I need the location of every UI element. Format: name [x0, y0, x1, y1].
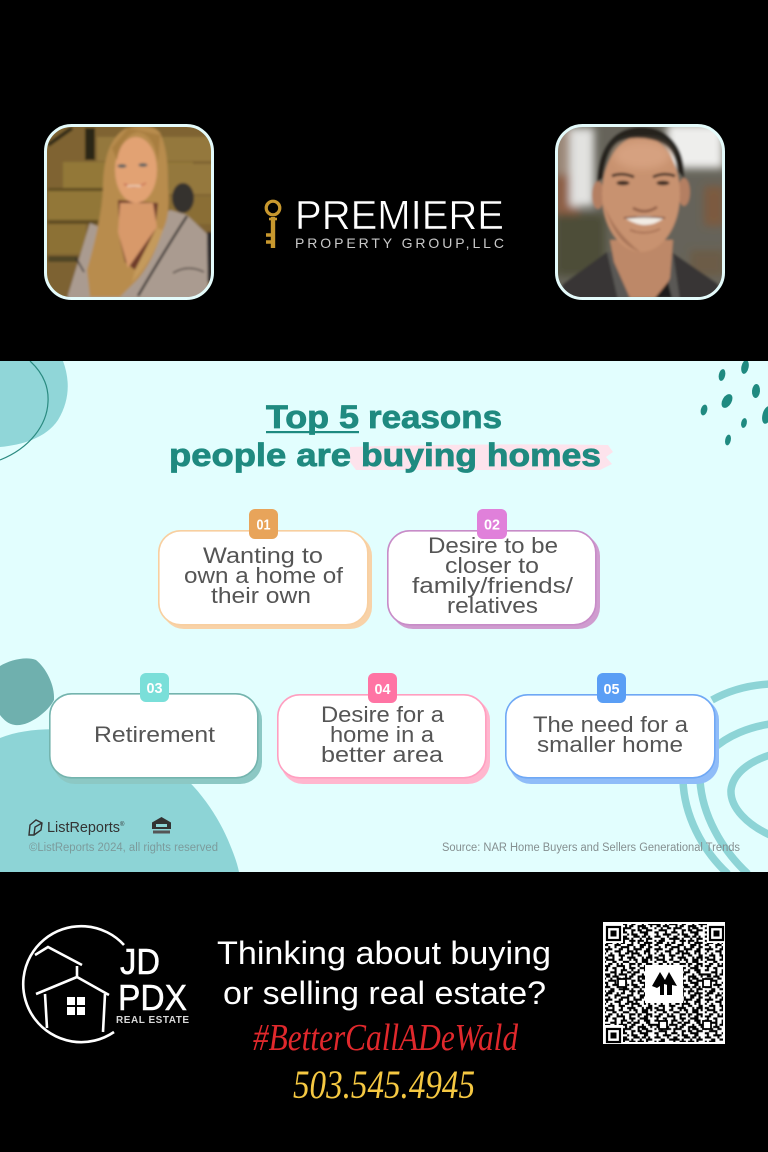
call to action text: #BetterCallADeWald — [253, 1017, 519, 1059]
footer: ListReports brand: ListReports — [47, 819, 120, 836]
card 03: Retirement — [94, 722, 215, 747]
photo: woman agent portrait — [44, 124, 214, 300]
card 01: 01 — [256, 516, 270, 534]
card 02: relatives — [447, 593, 538, 618]
card 05: The need for a — [533, 712, 689, 737]
logo: Premiere Property Group — [266, 192, 504, 251]
QR code — [603, 922, 725, 1044]
card 02 — [388, 509, 600, 629]
logo: JD PDX Real Estate: JD — [120, 941, 160, 982]
card 01 — [159, 509, 372, 629]
card 01: own a home of — [184, 563, 344, 588]
icon: house in circle — [23, 926, 124, 1042]
heading: buying homes — [361, 437, 601, 473]
card 04: 04 — [374, 681, 391, 698]
heading: people are — [169, 437, 351, 473]
call to action text: or selling real estate? — [223, 975, 546, 1011]
card 04: Desire for a — [321, 702, 445, 727]
card 01: their own — [211, 583, 311, 608]
logo: Premiere Property Group: PREMIERE — [295, 192, 504, 238]
card 01: Wanting to — [203, 543, 323, 568]
footer: ListReports brand: ® — [120, 821, 125, 828]
call to action text: 503.545.4945 — [293, 1062, 475, 1107]
card 02: Desire to be — [428, 533, 558, 558]
logo: JD PDX Real Estate: PDX — [118, 977, 187, 1018]
card 05: smaller home — [537, 732, 683, 757]
photo: man agent portrait — [555, 124, 725, 300]
logo: JD PDX Real Estate — [23, 926, 189, 1042]
card 03: 03 — [146, 680, 162, 697]
logo: JD PDX Real Estate: REAL ESTATE — [116, 1015, 189, 1026]
heading: Top 5 — [266, 399, 359, 435]
card 02: family/friends/ — [412, 573, 574, 598]
footer: ListReports brand: ©ListReports 2024, all rights reserved — [29, 842, 218, 854]
card 03 — [50, 673, 262, 784]
card 02: closer to — [445, 553, 539, 578]
footer: ListReports brand — [29, 817, 218, 854]
logo: Premiere Property Group: PROPERTY GROUP,LLC — [295, 235, 504, 251]
call to action text — [217, 935, 551, 1107]
card 04: better area — [321, 742, 444, 767]
call to action text: Thinking about buying — [217, 935, 551, 971]
card 05 — [506, 673, 719, 784]
card 05: 05 — [604, 681, 620, 698]
card 04: home in a — [330, 722, 435, 747]
background shapes — [0, 359, 768, 874]
icon: gold key — [266, 201, 280, 248]
heading — [169, 399, 613, 473]
heading: reasons — [368, 399, 502, 435]
panel: top 5 reasons — [0, 359, 768, 874]
card 02: 02 — [484, 516, 500, 534]
card 04 — [278, 673, 490, 784]
icon: twin up arrows — [652, 972, 677, 995]
source note: Source: NAR Home Buyers and Sellers Generational Trends — [442, 842, 740, 854]
